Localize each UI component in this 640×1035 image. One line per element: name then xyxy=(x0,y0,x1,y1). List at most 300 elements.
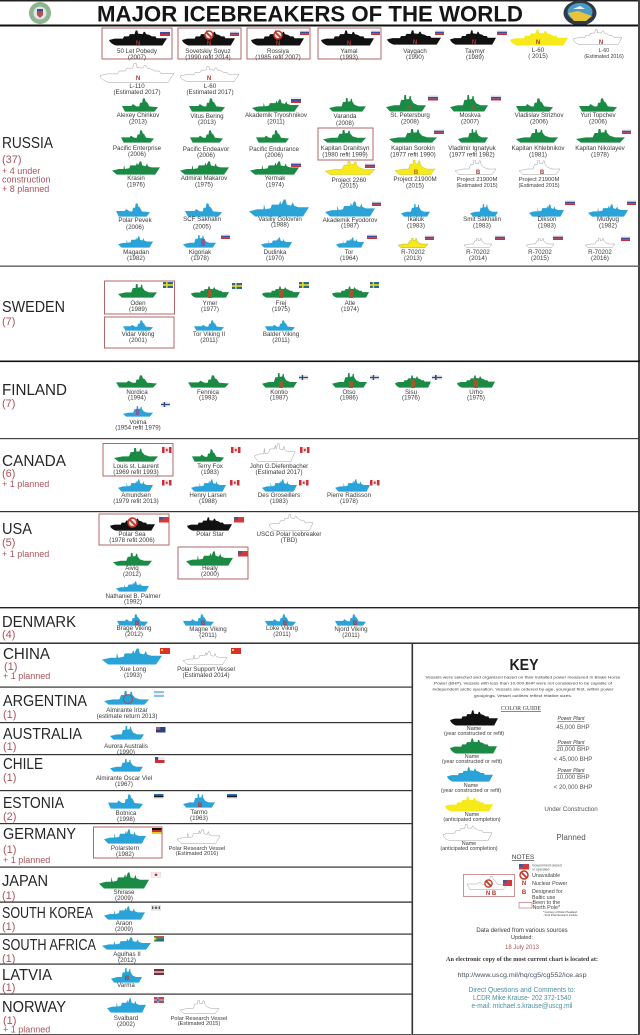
ship: Vaygach xyxy=(387,30,444,61)
ship: Akademik Fyodorov: Akademik Fyodorov xyxy=(323,217,378,224)
ship: Brage Viking: Brage Viking xyxy=(117,625,152,632)
ship: Vladislav Strizhov xyxy=(515,98,564,126)
panel: South Korea xyxy=(2,905,161,933)
ship: Amundsen: Amundsen xyxy=(121,492,151,499)
ship: 50 Let Pobedy xyxy=(109,30,170,61)
ship: 50 Let Pobedy: 50 Let Pobedy xyxy=(117,48,158,55)
ship: Voima xyxy=(115,402,170,432)
ship: Project 21900M planned second xyxy=(518,160,560,189)
ship: Araon: (2009) xyxy=(115,926,133,933)
panel: Russia xyxy=(2,28,636,262)
ship: Polarstern: (1982) xyxy=(116,851,134,858)
ship: Nathaniel B. Palmer: Nathaniel B. Palmer xyxy=(105,593,161,600)
heading: South Africa: SOUTH AFRICA xyxy=(2,937,97,954)
color guide: green 20,000 to 45,000 BHP: Power Plant xyxy=(558,740,585,746)
text block: contact: LCDR Mike Krause- 202 372-1540 xyxy=(473,995,571,1002)
ship: Louis St. Laurent xyxy=(113,447,172,476)
ship: Araon: Araon xyxy=(116,920,133,927)
ship: Varanda: Varanda xyxy=(334,113,357,120)
ship: Project 2260: Project 2260 xyxy=(332,177,367,184)
ship: Tarmo: (1963) xyxy=(190,815,208,822)
ship: Kapitan Khlebnikov xyxy=(512,129,565,158)
count: Finland: (7) xyxy=(2,398,15,410)
ship: Polar Support Vessel: (Estimated 2014) xyxy=(182,672,230,679)
ship: Polar Research Vessel, Germany: Polar Research Vessel xyxy=(169,846,225,852)
color guide: blue 10,000 to 20,000 BHP: (year constructed or refit) xyxy=(441,788,501,794)
ship: Polar Research Vessel, Norway: Polar Research Vessel xyxy=(171,1016,227,1022)
ship: Varma: B xyxy=(125,976,130,982)
ship: Botnica xyxy=(108,794,164,823)
ship: Sovetskiy Soyuz: Sovetskiy Soyuz xyxy=(185,48,231,55)
panel: China xyxy=(3,646,241,681)
ship: Moskva: Moskva xyxy=(459,112,481,119)
ship: Voima: (1954 refit 1979) xyxy=(115,424,161,432)
ship: Pacific Endeavor: (2006) xyxy=(197,152,215,159)
ship: John G. Diefenbacher: (Estimated 2017) xyxy=(255,469,303,476)
ship: Yermak: (1974) xyxy=(266,182,284,188)
heading: Germany: GERMANY xyxy=(3,826,76,843)
ship: USCG Polar Icebreaker xyxy=(256,514,322,544)
ship: Polar Star: Polar Star xyxy=(196,531,224,538)
ship: Botnica: Botnica xyxy=(116,810,137,817)
ship: Project 21900M planned: Project 21900M xyxy=(457,177,497,183)
ship: Taymyr: Taymyr xyxy=(465,48,485,55)
panel: Estonia xyxy=(3,794,237,823)
ship: L-60 planned 2016: N xyxy=(599,40,603,46)
ship: Njord Viking: Njord Viking xyxy=(334,626,368,633)
ship: L-110 planned xyxy=(100,64,174,96)
ship: Polar Star xyxy=(187,517,244,538)
text block: contact: e-mail: michael.s.krause@uscg.mil xyxy=(472,1003,573,1010)
ship: Akademik Tryoshnikov: Akademik Tryoshnikov xyxy=(245,112,308,119)
note: China planned: + 1 planned xyxy=(3,671,50,681)
count: Australia: (1) xyxy=(3,741,16,753)
panel: Latvia xyxy=(2,967,164,994)
count: South Africa: (1) xyxy=(2,953,15,965)
text block: key description: groupings. Vessel outlines reflect relative sizes. xyxy=(474,694,572,698)
ship: Moskva xyxy=(450,95,501,126)
ship: R-70202 planned 2015 xyxy=(526,235,563,262)
ship: Aurora Australis xyxy=(104,726,166,756)
panel: key xyxy=(426,657,620,1010)
color guide: black 45,000 BHP: Name xyxy=(467,726,481,732)
ship: Alexey Chirikov xyxy=(117,98,160,126)
ship: Xue Long: Xue Long xyxy=(120,666,147,673)
highlight box: Rossiya xyxy=(247,28,310,59)
ship: Araon xyxy=(104,905,161,933)
highlight box: Kapitan Dranitsyn xyxy=(318,128,373,160)
ship: R-70202 planned 2014: (2014) xyxy=(469,255,487,262)
heading: Finland: FINLAND xyxy=(2,382,67,399)
ship: Ymer: (1977) xyxy=(201,306,219,313)
ship: Kapitan Sorokin xyxy=(389,129,444,158)
ship: 50 Let Pobedy: N xyxy=(136,41,140,47)
ship: Rossiya: N xyxy=(276,41,280,47)
ship: Admiral Makarov: Admiral Makarov xyxy=(181,175,228,182)
ship: Dudinka: (1970) xyxy=(266,255,284,262)
ship: Moskva: B xyxy=(471,106,476,112)
ship: Tor: Tor xyxy=(345,249,353,256)
heading: China: CHINA xyxy=(3,646,51,663)
ship: Vladislav Strizhov: Vladislav Strizhov xyxy=(515,112,564,119)
ship: Kapitan Sorokin: (1977 refit 1990) xyxy=(390,152,436,158)
heading: color guide: COLOR GUIDE xyxy=(501,706,541,712)
ship: L-110 planned: N xyxy=(136,76,140,82)
ship: Project 21900M under construction: (2015) xyxy=(406,182,424,190)
note: Russia under construction and planned: + 4 under xyxy=(2,166,40,176)
color guide: outline planned: Name xyxy=(462,841,476,847)
ship: Kapitan Dranitsyn xyxy=(321,130,370,158)
ship: Krasin: Krasin xyxy=(127,175,145,182)
heading: Canada: CANADA xyxy=(2,453,67,470)
ship: Pacific Endurance: (2006) xyxy=(265,152,283,159)
ship: Pierre Radisson: (1978) xyxy=(340,498,358,505)
ship: Akademik Fyodorov: (1987) xyxy=(341,222,359,230)
highlight box: Sovetskiy Soyuz xyxy=(178,28,241,59)
ship: Pierre Radisson xyxy=(327,479,380,505)
ship: Loke Viking: Loke Viking xyxy=(266,625,298,632)
ship: Des Groseillers: Des Groseillers xyxy=(258,492,300,499)
ship: Project 21900M under construction: B xyxy=(414,170,419,176)
ship: Project 2260 xyxy=(325,161,375,190)
ship: Polar Pevek: (2006) xyxy=(126,224,144,231)
ship: L-60 planned 2016: (Estimated 2016) xyxy=(584,54,624,60)
ship: Rossiya: Rossiya xyxy=(267,48,290,55)
ship: L-60 under construction xyxy=(510,29,568,60)
ship: Svalbard xyxy=(107,997,164,1028)
ship: Njord Viking: (2011) xyxy=(342,632,360,639)
ship: Yermak: Yermak xyxy=(265,175,286,182)
ship: Aiviq xyxy=(113,553,152,578)
text block: sources and update: Data derived from various sources xyxy=(476,928,568,934)
ship: Shirase xyxy=(99,872,161,902)
color guide: yellow under construction: Name xyxy=(465,812,479,818)
notes sample ship: N B xyxy=(486,891,497,897)
ship: Tor Viking II: Tor Viking II xyxy=(193,331,225,338)
text block: key description: Power (BHP). Vessels with less than 10,000 BHP were not considered to be capable of xyxy=(434,682,613,686)
ship: Project 21900M planned: B xyxy=(476,170,481,176)
ship: St. Petersburg xyxy=(386,95,438,126)
ship: R-70202 planned 2014: R-70202 xyxy=(466,249,490,256)
panel divider: key xyxy=(412,643,413,1035)
ship: Kigoriak xyxy=(183,234,230,262)
ship: Kapitan Dranitsyn: Kapitan Dranitsyn xyxy=(321,145,370,152)
heading: Estonia: ESTONIA xyxy=(3,795,65,812)
panel: Norway xyxy=(2,997,227,1034)
ship: Healy: (2000) xyxy=(201,571,219,578)
panel: Germany xyxy=(3,826,225,865)
count: Estonia: (2) xyxy=(3,811,16,823)
ship: Magadan xyxy=(118,236,153,262)
ship: John G. Diefenbacher xyxy=(250,444,310,476)
ship: Ikaluk: (1983) xyxy=(407,222,425,230)
ship: R-70202 under construction: (2013) xyxy=(404,255,422,262)
color guide: black 45,000 BHP: Power Plant xyxy=(558,716,585,722)
ship: Magadan: (1982) xyxy=(127,255,145,262)
count: Denmark: (4) xyxy=(2,629,15,641)
color guide: yellow under construction: (anticipated completion) xyxy=(443,817,501,823)
ship: Oden: Oden xyxy=(130,300,146,307)
heading: USA: USA xyxy=(2,521,33,538)
ship: Vaygach: N xyxy=(413,40,417,46)
panel: Australia xyxy=(3,726,166,756)
ship: Dikson: (1983) xyxy=(538,222,556,230)
count: Sweden: (7) xyxy=(2,316,15,328)
note: been to the North Pole xyxy=(519,900,561,911)
count: Canada: (6) xyxy=(2,468,15,480)
ship: L-60 planned 2017: N xyxy=(207,76,211,82)
ship: Vidar Viking xyxy=(122,320,155,344)
ship: R-70202 under construction xyxy=(398,235,434,262)
ship: Fennica: Fennica xyxy=(197,389,220,396)
ship: Vladimir Ignatyuk xyxy=(448,129,497,158)
ship: Agulhas II: Agulhas II xyxy=(113,951,141,958)
highlight box: Yamal xyxy=(318,28,381,59)
ship: L-60 under construction: N xyxy=(536,40,540,46)
ship: Atle: Atle xyxy=(345,300,356,307)
text block: sources and update: Updated: xyxy=(511,935,533,941)
ship: Vidar Viking: Vidar Viking xyxy=(122,331,155,338)
title rule xyxy=(0,24,640,26)
note: government owned: or operated xyxy=(532,868,549,872)
ship: Loke Viking: (2011) xyxy=(273,631,291,638)
ship: Atle: (1974) xyxy=(341,306,359,313)
ship: R-70202 under construction: R-70202 xyxy=(401,249,425,256)
ship: Yamal: Yamal xyxy=(340,48,358,55)
panel: Sweden xyxy=(2,281,379,348)
ship: Almirante Irizar xyxy=(97,691,164,720)
ship: Project 21900M under construction xyxy=(393,160,437,190)
ship: Yamal: (1993) xyxy=(340,54,358,61)
heading: key: KEY xyxy=(510,657,539,674)
note: unavailable: Unavailable xyxy=(532,873,560,879)
heading: Argentina: ARGENTINA xyxy=(3,693,88,710)
ship: Brage Viking: (2012) xyxy=(125,631,143,638)
ship: Tarmo: Tarmo xyxy=(190,809,208,816)
ship: L-60 planned 2016: L-60 xyxy=(599,48,609,54)
ship: Project 2260: (2015) xyxy=(340,182,358,190)
note: footnote xyxy=(543,911,578,917)
count: Norway: (1) xyxy=(3,1015,16,1027)
ship: Tor Viking II xyxy=(193,320,225,344)
ship: Shirase: (2009) xyxy=(115,895,133,902)
ship: Sovetskiy Soyuz xyxy=(182,30,239,61)
color guide: green 20,000 to 45,000 BHP: (year constructed or refit) xyxy=(442,759,502,765)
ship: Vasiliy Golovnin: (1988) xyxy=(271,222,289,228)
ship: Kapitan Khlebnikov: Kapitan Khlebnikov xyxy=(512,145,565,152)
ship: Fennica xyxy=(188,375,229,402)
text block: electronic copy: An electronic copy of the most current chart is located at: xyxy=(446,957,598,963)
note: Russia under construction and planned: construction xyxy=(2,174,51,184)
ship: Aurora Australis: Aurora Australis xyxy=(104,743,148,750)
ship: Magne Viking: Magne Viking xyxy=(189,626,227,633)
ship: Henry Larsen: Henry Larsen xyxy=(189,492,227,499)
ship: Almirante Oscar Viel xyxy=(96,757,164,788)
ship: Kapitan Nikolayev xyxy=(575,129,631,158)
ship: Almirante Oscar Viel: (1967) xyxy=(115,781,133,788)
note: footnote: - Scott Polar Research Institute xyxy=(543,914,578,917)
ship: Aiviq: Aiviq xyxy=(125,565,139,572)
ship: Kigoriak: Kigoriak xyxy=(189,249,212,256)
note: government owned xyxy=(519,864,562,872)
ship: Pierre Radisson: Pierre Radisson xyxy=(327,492,372,499)
panel: Finland xyxy=(2,373,495,432)
ship: Vitus Bering: Vitus Bering xyxy=(190,113,224,120)
color guide: outline planned: Planned xyxy=(556,833,586,842)
ship: Vidar Viking: (2001) xyxy=(129,337,147,344)
ship: Tor xyxy=(336,234,377,262)
ship: Pacific Enterprise: Pacific Enterprise xyxy=(113,145,162,152)
heading: South Korea: SOUTH KOREA xyxy=(2,905,94,922)
ship: Des Groseillers: (1983) xyxy=(270,498,288,505)
panel: Chile xyxy=(3,756,164,788)
text block: key description: Vessels were selected and organized based on their installed power measured in Brake Horse xyxy=(426,676,620,680)
ship: Njord Viking: B xyxy=(353,621,358,627)
ship: Nathaniel B. Palmer xyxy=(105,581,161,606)
notes legend xyxy=(519,864,578,917)
ship: Polar Pevek: Polar Pevek xyxy=(118,217,153,224)
count: Chile: (1) xyxy=(3,772,16,784)
ship: Project 21900M under construction: Project 21900M xyxy=(393,176,437,183)
note: government owned: Government owned xyxy=(532,864,562,868)
ship: R-70202 planned 2016: R-70202 xyxy=(588,249,612,256)
ship: Amundsen xyxy=(113,479,172,505)
ship: Akademik Tryoshnikov xyxy=(245,97,308,126)
ship: Project 21900M planned second: B xyxy=(540,170,545,176)
ship: Frej: (1975) xyxy=(272,306,290,313)
ship: Voima: Voima xyxy=(129,419,147,426)
ship: Henry Larsen xyxy=(189,479,240,505)
ship: Polar Research Vessel, Germany xyxy=(169,829,225,857)
ship: Urho: Urho xyxy=(469,389,483,396)
ship: Rossiya: (1985 refit 2007) xyxy=(255,54,301,61)
ship: Tarmo: B xyxy=(198,803,203,809)
count: Germany: (1) xyxy=(3,844,16,856)
ship: L-60 under construction: ( 2015) xyxy=(528,53,548,60)
ship: Polar Sea: (1978 refit 2006) xyxy=(109,537,155,544)
text block: url: http://www.uscg.mil/hq/cg5/cg552/ice.asp xyxy=(458,972,587,979)
note: been to the North Pole: North Pole* xyxy=(532,905,561,911)
ship: Nathaniel B. Palmer: (1992) xyxy=(124,598,142,606)
note: been to the North Pole: Been to the xyxy=(532,900,560,906)
ship: Urho: (1975) xyxy=(467,394,485,402)
ship: Tor Viking II: (2011) xyxy=(200,337,218,344)
color guide: blue 10,000 to 20,000 BHP: Name xyxy=(464,783,478,789)
ship: L-60 under construction: L-60 xyxy=(532,47,545,54)
ship: Vasiliy Golovnin xyxy=(249,200,309,228)
ship: Krasin xyxy=(112,161,160,188)
note: designed for Baltic use xyxy=(522,889,563,901)
ship: Healy xyxy=(186,551,248,578)
ship: Varma xyxy=(111,968,164,989)
ship: Botnica: (1998) xyxy=(117,816,135,823)
ship: Polar Sea xyxy=(109,517,169,544)
ship: Mudyug xyxy=(588,200,636,230)
ship: Njord Viking xyxy=(334,614,368,639)
ship: Mudyug: (1982) xyxy=(599,222,617,230)
ship: Brage Viking xyxy=(117,614,152,638)
ship: Svalbard: Svalbard xyxy=(114,1015,139,1022)
ship: Yamal xyxy=(321,30,380,61)
ship: Kontio xyxy=(262,373,308,402)
ship: Loke Viking: B xyxy=(283,621,288,627)
ship: Sovetskiy Soyuz: N xyxy=(207,41,211,47)
ship: Tarmo xyxy=(183,794,237,822)
notes sample ship xyxy=(464,874,514,897)
color guide: outline planned xyxy=(440,824,586,852)
ship: R-70202 planned 2014 xyxy=(464,235,505,262)
ship: Henry Larsen: (1988) xyxy=(199,498,217,505)
ship: Ymer xyxy=(191,283,242,313)
text block: key description xyxy=(426,676,620,698)
ship: Magne Viking xyxy=(183,614,227,639)
color guide: green 20,000 to 45,000 BHP xyxy=(442,738,592,765)
ship: Yuri Topchev xyxy=(579,98,617,126)
ship: Smit Sakhalin: (1983) xyxy=(473,222,491,230)
ship: Dikson: Dikson xyxy=(538,216,557,223)
ship: Xue Long: (1993) xyxy=(124,672,142,679)
ship: Frej: Frej xyxy=(276,300,286,307)
note: footnote: * Courtesy of Robert Headland xyxy=(543,911,578,914)
ship: L-110 planned: (Estimated 2017) xyxy=(113,89,161,96)
ship: Kontio: Kontio xyxy=(270,389,288,396)
top border xyxy=(0,0,640,2)
ship: Admiral Makarov: (1975) xyxy=(195,182,213,188)
ship: St. Petersburg: (2008) xyxy=(401,118,419,126)
color guide: green 20,000 to 45,000 BHP: < 45,000 BHP xyxy=(554,756,592,763)
ship: Varma: Varma xyxy=(117,982,135,989)
ship: Terry Fox: Terry Fox xyxy=(197,463,224,470)
panel: South Africa xyxy=(2,936,164,965)
note: designed for Baltic use: Designed for xyxy=(532,889,563,895)
ship: Polar Support Vessel xyxy=(177,648,241,679)
ship: Ymer: Ymer xyxy=(203,300,217,307)
ship: Svalbard: (2002) xyxy=(117,1021,135,1028)
note: Russia under construction and planned: + 8 planned xyxy=(2,184,49,194)
ship: Magadan: Magadan xyxy=(123,249,149,256)
ship: Almirante Irizar: (estimate return 2013) xyxy=(97,713,157,720)
count: South Korea: (1) xyxy=(2,921,15,933)
ship: L-110 planned: L-110 xyxy=(129,83,145,90)
heading: Australia: AUSTRALIA xyxy=(3,726,83,743)
ship: Kigoriak: (1978) xyxy=(191,255,209,262)
ship: Atle xyxy=(332,282,379,313)
ship: Yuri Topchev: (2006) xyxy=(589,118,607,126)
color guide: yellow under construction: Under Construction xyxy=(544,806,598,813)
highlight box: Healy xyxy=(178,547,248,579)
bottom border xyxy=(0,1034,640,1035)
count: Russia: (37) xyxy=(2,154,22,166)
ship: Xue Long xyxy=(102,648,170,679)
ship: Vladimir Ignatyuk: Vladimir Ignatyuk xyxy=(448,145,497,152)
ship: Polar Research Vessel, Norway xyxy=(171,1000,227,1027)
right border xyxy=(638,0,640,1035)
ship: Smit Sakhalin xyxy=(463,204,501,230)
panel: Denmark xyxy=(2,614,368,641)
panel: USA xyxy=(2,514,322,606)
count: Japan: (1) xyxy=(2,890,15,902)
ship: Dudinka: Dudinka xyxy=(264,249,287,256)
heading: Latvia: LATVIA xyxy=(2,967,53,984)
ship: R-70202 planned 2016: (2016) xyxy=(591,255,609,262)
ship: Project 21900M planned second: (Estimated 2015) xyxy=(518,183,560,189)
ship: Balder Viking: Balder Viking xyxy=(263,331,300,338)
text block: sources and update: 18 July 2013 xyxy=(505,945,540,951)
ship: L-60 planned 2017: (Estimated 2017) xyxy=(186,89,234,96)
ship: Balder Viking: (2011) xyxy=(272,337,290,344)
highlight box: Polar Sea xyxy=(99,514,169,545)
ship: Nordica: (1994) xyxy=(128,394,146,402)
